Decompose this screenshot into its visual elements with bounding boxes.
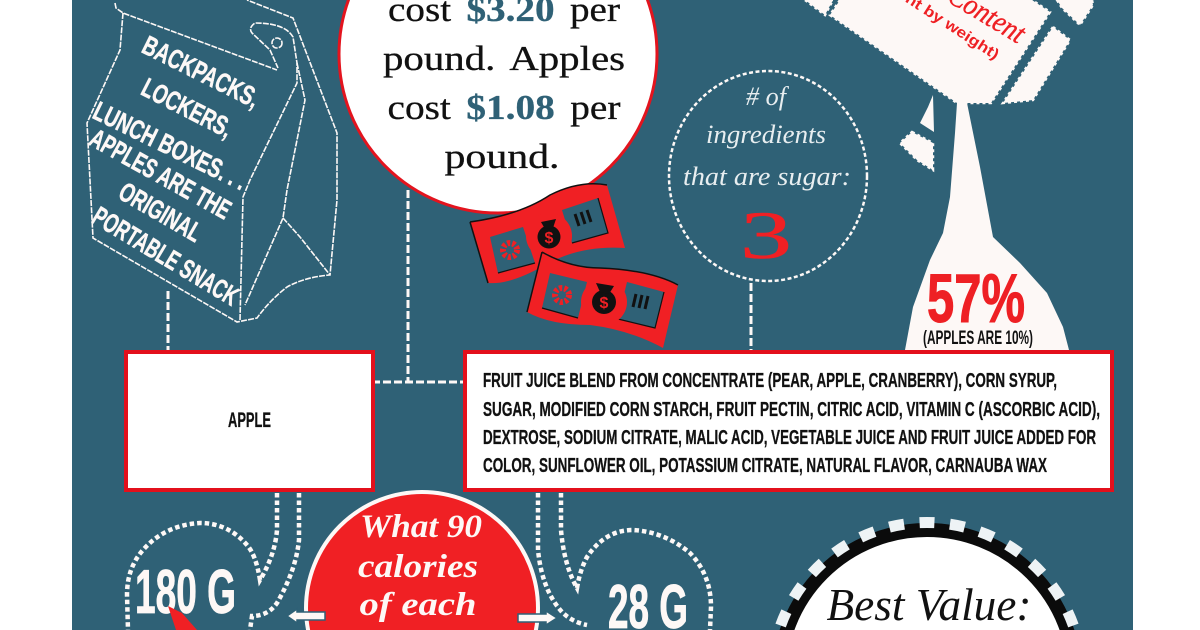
apple label box: APPLE	[228, 409, 271, 432]
red calories circle: of each	[360, 587, 476, 623]
icon: lunch bag with text: BACKPACKS,	[137, 30, 265, 114]
icon: dollar bill front: $	[600, 295, 609, 312]
best value badge: Best Value:	[826, 579, 1032, 630]
price circle: pound.	[444, 137, 560, 176]
connector lines: dotted connectors to boxes	[168, 190, 751, 382]
180 G statistic	[135, 558, 236, 630]
icon: dollar bill back	[470, 184, 625, 283]
ingredients list box	[465, 352, 1112, 490]
icon: dollar bill front	[527, 252, 678, 348]
best value badge	[772, 522, 1082, 630]
icon: lunch bag with text: ORIGINAL	[114, 176, 207, 248]
icon: lunch bag with text: LUNCH BOXES. . .	[88, 96, 252, 196]
arrow: left	[287, 609, 325, 623]
sugar ticket pouring	[805, 0, 1093, 170]
180 G statistic: 180 G	[135, 558, 236, 627]
red calories circle: What 90	[360, 509, 482, 545]
icon: lunch bag with text: PORTABLE SNACK	[87, 201, 244, 312]
sugar stream with 57% statistic: (APPLES ARE 10%)	[923, 328, 1033, 349]
ingredients sugar circle: 3	[740, 197, 792, 273]
dotted path: right arrow connector	[538, 493, 587, 625]
arrow: right	[518, 611, 557, 625]
icon: dollar bill back: $	[545, 230, 554, 247]
ingredients sugar circle: # of	[746, 82, 790, 111]
apple label box	[126, 352, 373, 490]
price circle	[339, 0, 657, 213]
price circle: cost $1.08 per	[388, 88, 621, 127]
red calories circle: calories	[358, 549, 478, 585]
sugar stream with 57% statistic	[905, 103, 1069, 350]
dotted path: snack weight outline	[561, 493, 711, 630]
sugar content label text	[902, 0, 1032, 63]
ingredients sugar circle: that are sugar:	[683, 162, 851, 191]
icon: lunch bag with text: LOCKERS,	[137, 72, 238, 144]
red calories circle	[306, 492, 538, 630]
dotted path: left arrow connector	[250, 493, 299, 630]
icon: lunch bag with text	[84, 0, 337, 322]
ingredients sugar circle: ingredients	[706, 120, 826, 149]
icon: red apple tip	[168, 606, 197, 630]
price circle: pound. Apples	[383, 39, 625, 78]
icon: lunch bag with text: APPLES ARE THE	[84, 123, 236, 225]
sugar stream with 57% statistic: 57%	[927, 260, 1025, 337]
ingredients sugar circle	[669, 71, 867, 281]
dotted path: apple weight outline	[127, 493, 277, 630]
